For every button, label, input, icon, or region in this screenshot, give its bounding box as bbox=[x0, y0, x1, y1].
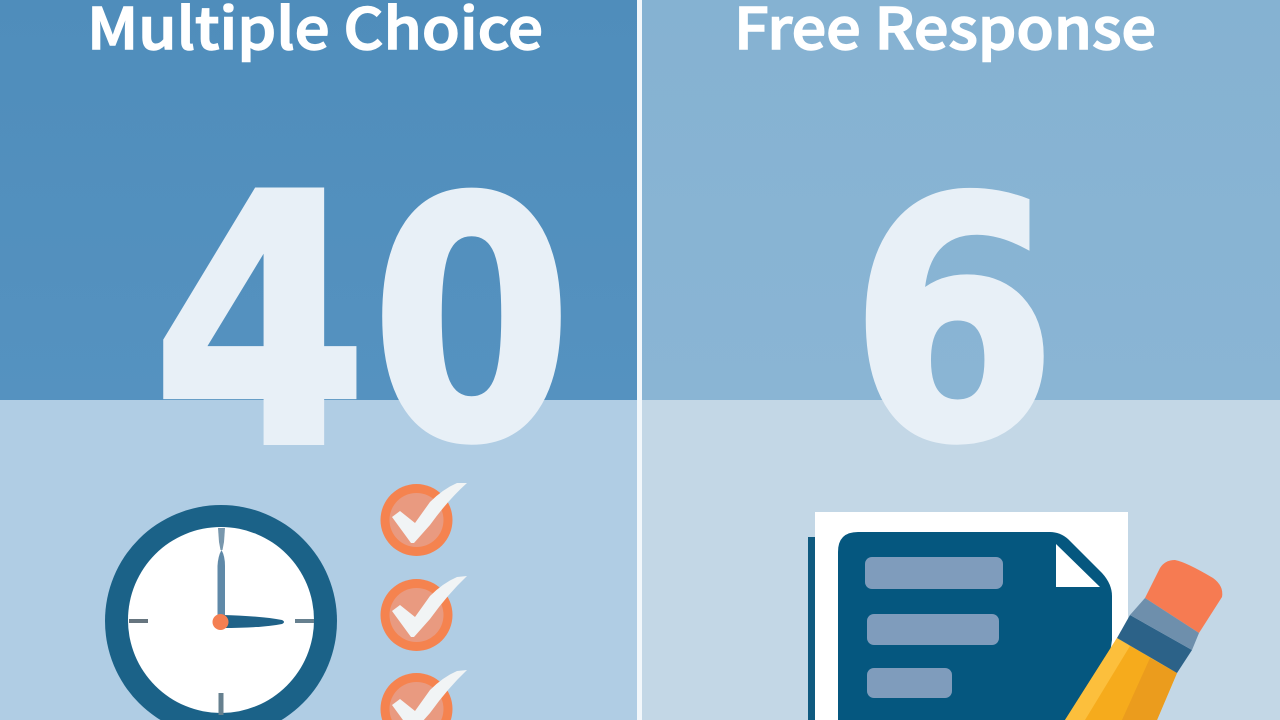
panel: multiple choice lower bbox=[0, 400, 637, 720]
number: 6: 6 bbox=[850, 130, 1057, 516]
icon: clock bbox=[105, 505, 337, 720]
icon: check item 2 bbox=[380, 576, 467, 651]
number: 40 bbox=[152, 123, 572, 524]
icon: pencil bbox=[1065, 560, 1222, 720]
icon: check item 3 bbox=[380, 670, 467, 720]
panel: multiple choice header bbox=[0, 0, 637, 400]
panel: free response header bbox=[642, 0, 1280, 400]
number: 40: 0 bbox=[371, 130, 572, 516]
icon: document bbox=[808, 512, 1128, 720]
panel: free response lower bbox=[642, 400, 1280, 720]
number: 40: 4 bbox=[152, 123, 368, 524]
icon: check item 1 bbox=[380, 483, 467, 556]
